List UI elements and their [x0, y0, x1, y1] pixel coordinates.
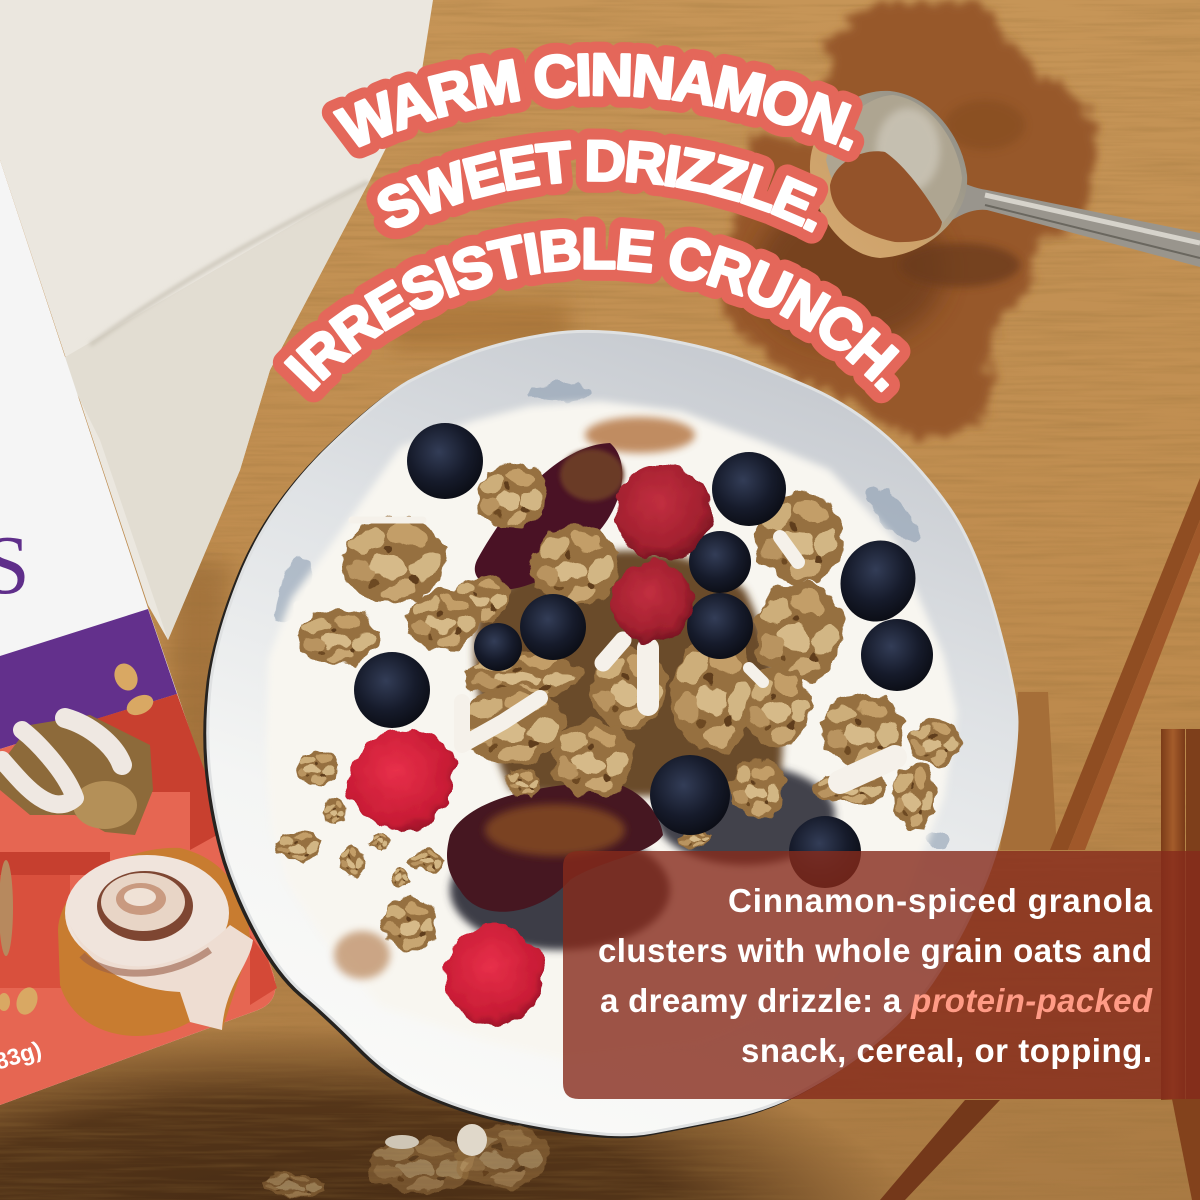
headline: warm cinnamon, sweet drizzle, irresistible crunch: SWEET DRIZZLE. — [377, 140, 818, 233]
plank patch — [1000, 692, 1057, 850]
chia pudding and dark base — [450, 551, 835, 950]
berry jam — [447, 443, 663, 912]
headline arc outline: SWEET DRIZZLE. — [366, 128, 828, 244]
granola clusters — [275, 462, 961, 951]
bag oats — [0, 660, 156, 1018]
diagonal sticks — [1050, 478, 1200, 850]
blueberries — [354, 423, 933, 888]
spoon with cinnamon — [810, 91, 1200, 267]
linen cloth — [0, 0, 433, 640]
plate — [205, 331, 1017, 1137]
caption text: a dreamy drizzle: a protein-packed — [600, 982, 1153, 1019]
caption text — [598, 882, 1153, 1069]
spoon cinnamon scoop — [830, 151, 942, 242]
headline: warm cinnamon, sweet drizzle, irresistible crunch: IRRESISTIBLE CRUNCH. — [284, 228, 900, 392]
headline arc outline: IRRESISTIBLE CRUNCH. — [272, 216, 910, 404]
headline arc outline: WARM CINNAMON. — [322, 42, 864, 162]
plate blue floral marks — [267, 383, 949, 848]
granola bag — [0, 160, 277, 1105]
raspberries — [347, 464, 711, 1026]
cinnamon powder pile — [720, 0, 1097, 440]
white icing drizzle — [352, 520, 895, 782]
bag red section — [0, 694, 275, 1105]
cinnamon dusting — [585, 417, 695, 453]
vertical sticks — [1161, 729, 1185, 1100]
bag purple band — [0, 609, 177, 749]
headline arc outline — [272, 42, 910, 616]
headline: warm cinnamon, sweet drizzle, irresistible crunch: WARM CINNAMON. — [332, 52, 854, 152]
caption panel — [563, 851, 1200, 1099]
headline: warm cinnamon, sweet drizzle, irresistible crunch — [284, 52, 900, 392]
yogurt — [270, 405, 953, 1055]
spoon handle — [945, 175, 1200, 267]
bag granola left edge — [0, 860, 13, 956]
caption text: snack, cereal, or topping. — [741, 1032, 1152, 1069]
granola crumbs on table — [261, 1124, 550, 1196]
spoon bowl — [810, 91, 967, 258]
caption text: clusters with whole grain oats and — [598, 932, 1152, 969]
caption text: Cinnamon-spiced granola — [728, 882, 1153, 919]
bag cinnamon roll — [58, 848, 253, 1036]
cinnamon sticks — [880, 478, 1200, 1200]
bag granola cluster with drizzle — [0, 715, 153, 835]
